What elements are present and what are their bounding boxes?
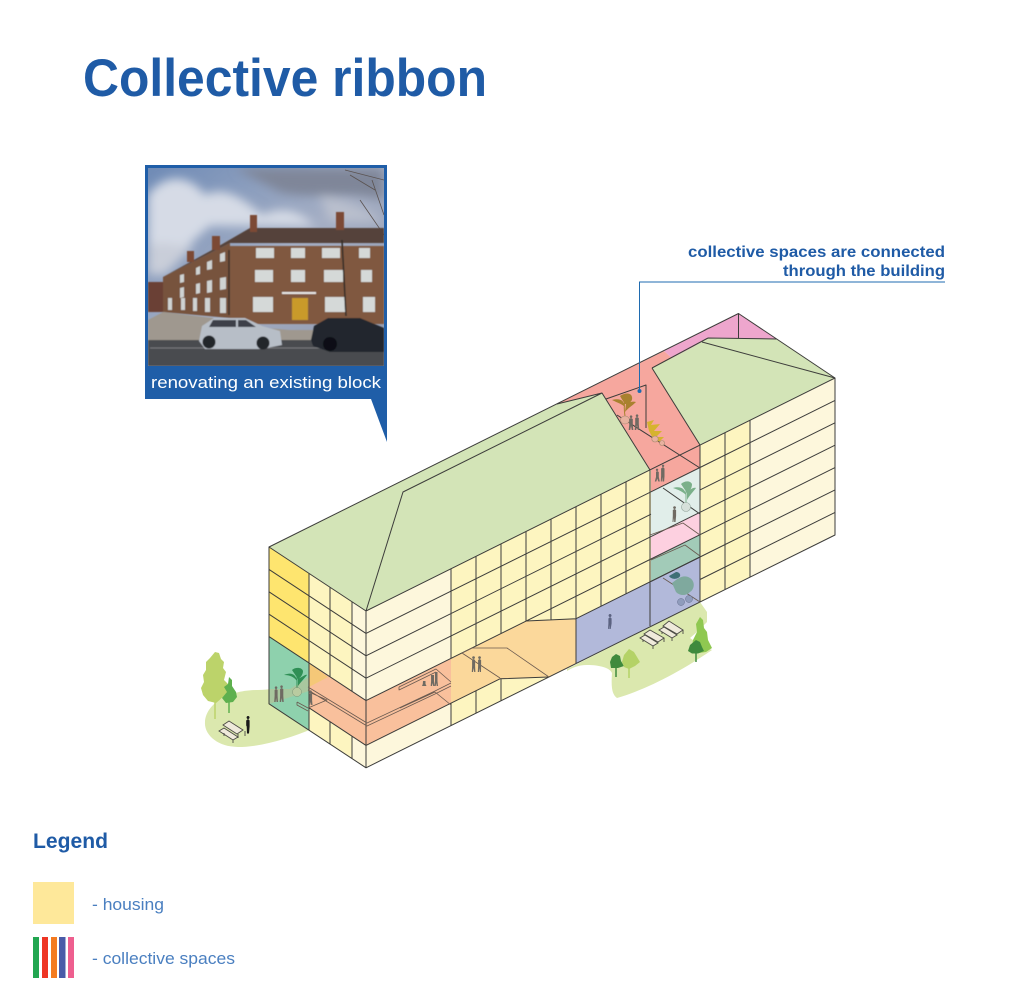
trees left xyxy=(201,652,237,719)
plant: blue floor xyxy=(669,572,694,606)
long facade xyxy=(366,378,835,768)
legend xyxy=(33,830,235,978)
title: Collective ribbon xyxy=(83,49,487,108)
tree: tall light green xyxy=(201,652,228,719)
photo caption: renovating an existing block xyxy=(151,373,382,392)
silver car xyxy=(199,318,282,349)
plant: pale teal floor xyxy=(673,481,696,512)
legend heading: Legend xyxy=(33,830,108,853)
plant: roof, yellow xyxy=(647,420,664,446)
dark teal collective floor xyxy=(651,535,700,581)
tree: green xyxy=(222,677,237,713)
building line work xyxy=(269,314,835,768)
picnic bench left xyxy=(219,721,245,743)
long facade housing bays xyxy=(366,569,451,768)
short facade housing bays xyxy=(309,573,352,759)
roof: green sections xyxy=(269,338,835,611)
red stair panel xyxy=(651,445,700,492)
people on stair panel xyxy=(655,465,664,482)
short facade xyxy=(269,547,366,768)
people silhouettes xyxy=(274,414,676,705)
photo of existing housing block xyxy=(148,168,384,366)
roof: red collective ribbon xyxy=(557,351,700,470)
tree: light green left xyxy=(622,649,640,678)
picnic benches right xyxy=(640,621,683,649)
light orange collective floor xyxy=(451,619,576,703)
tree: light green right xyxy=(692,617,712,653)
person on blue floor xyxy=(608,614,612,629)
building xyxy=(163,243,230,318)
pink collective floor xyxy=(651,512,700,559)
people in green space xyxy=(274,685,284,702)
callout frame and tail xyxy=(145,165,387,442)
callout: connected spaces xyxy=(638,244,945,393)
people on light orange floor xyxy=(472,656,481,672)
left park lawn xyxy=(205,670,312,747)
dark car xyxy=(311,318,384,352)
right park lawn xyxy=(567,602,712,698)
trees right xyxy=(610,617,712,678)
people on roof xyxy=(629,414,639,430)
orange collective floor xyxy=(366,658,451,745)
callout text xyxy=(688,244,945,280)
legend swatch: collective spaces xyxy=(33,937,74,978)
leader dot xyxy=(638,389,642,393)
tree: dark green left xyxy=(610,654,624,677)
roof: pink collective ridge xyxy=(664,314,777,358)
short facade housing, bright yellow xyxy=(269,547,309,663)
isometric building xyxy=(269,314,835,768)
legend label: housing: - housing xyxy=(92,895,164,914)
people on orange balcony xyxy=(422,672,438,686)
lawn tint seen through green space xyxy=(269,677,309,704)
short facade collective space, green xyxy=(269,637,309,730)
tree: dark green right xyxy=(688,640,704,662)
person on corner balcony xyxy=(309,690,312,705)
plant: corner green space xyxy=(284,668,307,696)
photo callout: existing block xyxy=(145,165,387,442)
standing person xyxy=(246,716,250,734)
legend label: collective spaces: - collective spaces xyxy=(92,949,235,968)
legend swatch: housing xyxy=(33,882,74,924)
short facade collective space, orange xyxy=(309,663,366,745)
leader line xyxy=(640,282,945,391)
plant: roof, brown xyxy=(612,394,636,424)
callout text: collective spaces are connected xyxy=(688,244,945,261)
lawn tint seen through orange space xyxy=(309,663,328,687)
blue collective floor xyxy=(576,557,700,664)
pale teal collective floor xyxy=(651,468,700,537)
interior balcony lines xyxy=(297,523,700,726)
callout text: through the building xyxy=(783,263,945,280)
person on pale teal floor xyxy=(672,506,676,522)
